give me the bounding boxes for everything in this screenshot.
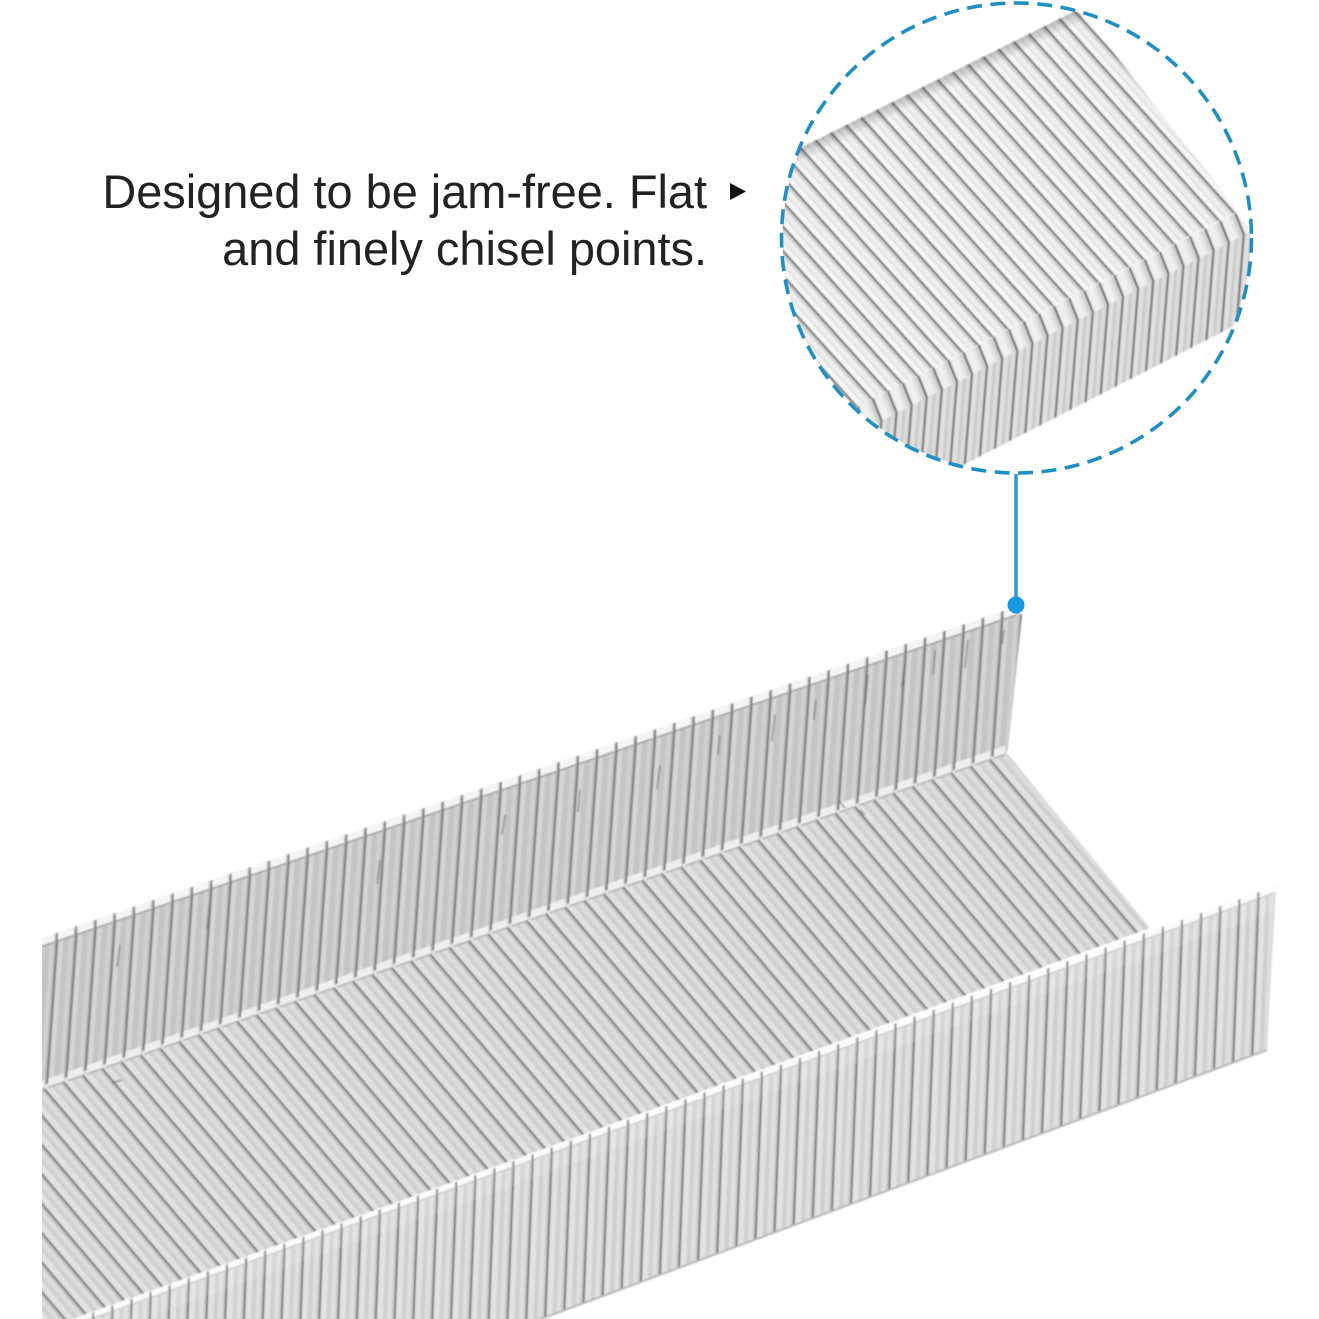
surface smudges <box>112 630 1004 1083</box>
magnified top edge shading <box>795 12 1082 163</box>
magnified top face <box>782 12 1236 408</box>
dashed lens outline <box>782 3 1252 473</box>
connector dot <box>1008 596 1024 614</box>
icon: pointer arrow <box>730 183 746 200</box>
connector line <box>1014 474 1018 605</box>
callout text <box>102 166 707 275</box>
staple strip <box>30 606 1276 1319</box>
near wall upper band <box>60 886 1276 1319</box>
callout line one: Designed to be jam-free. Flat <box>102 166 707 218</box>
base channel <box>30 752 1150 1319</box>
magnified bend <box>856 212 1250 424</box>
near wall bottom edge <box>530 1050 1267 1319</box>
far wall top caps <box>30 606 1016 952</box>
crease caps <box>30 746 1005 1095</box>
callout line two: and finely chisel points. <box>222 223 707 275</box>
magnified side face <box>876 232 1250 466</box>
magnified staple surface <box>782 12 1250 466</box>
near wall top caps <box>60 886 1276 1319</box>
near wall <box>60 886 1276 1319</box>
far wall <box>30 608 1022 1095</box>
magnified detail circle <box>780 1 1254 475</box>
